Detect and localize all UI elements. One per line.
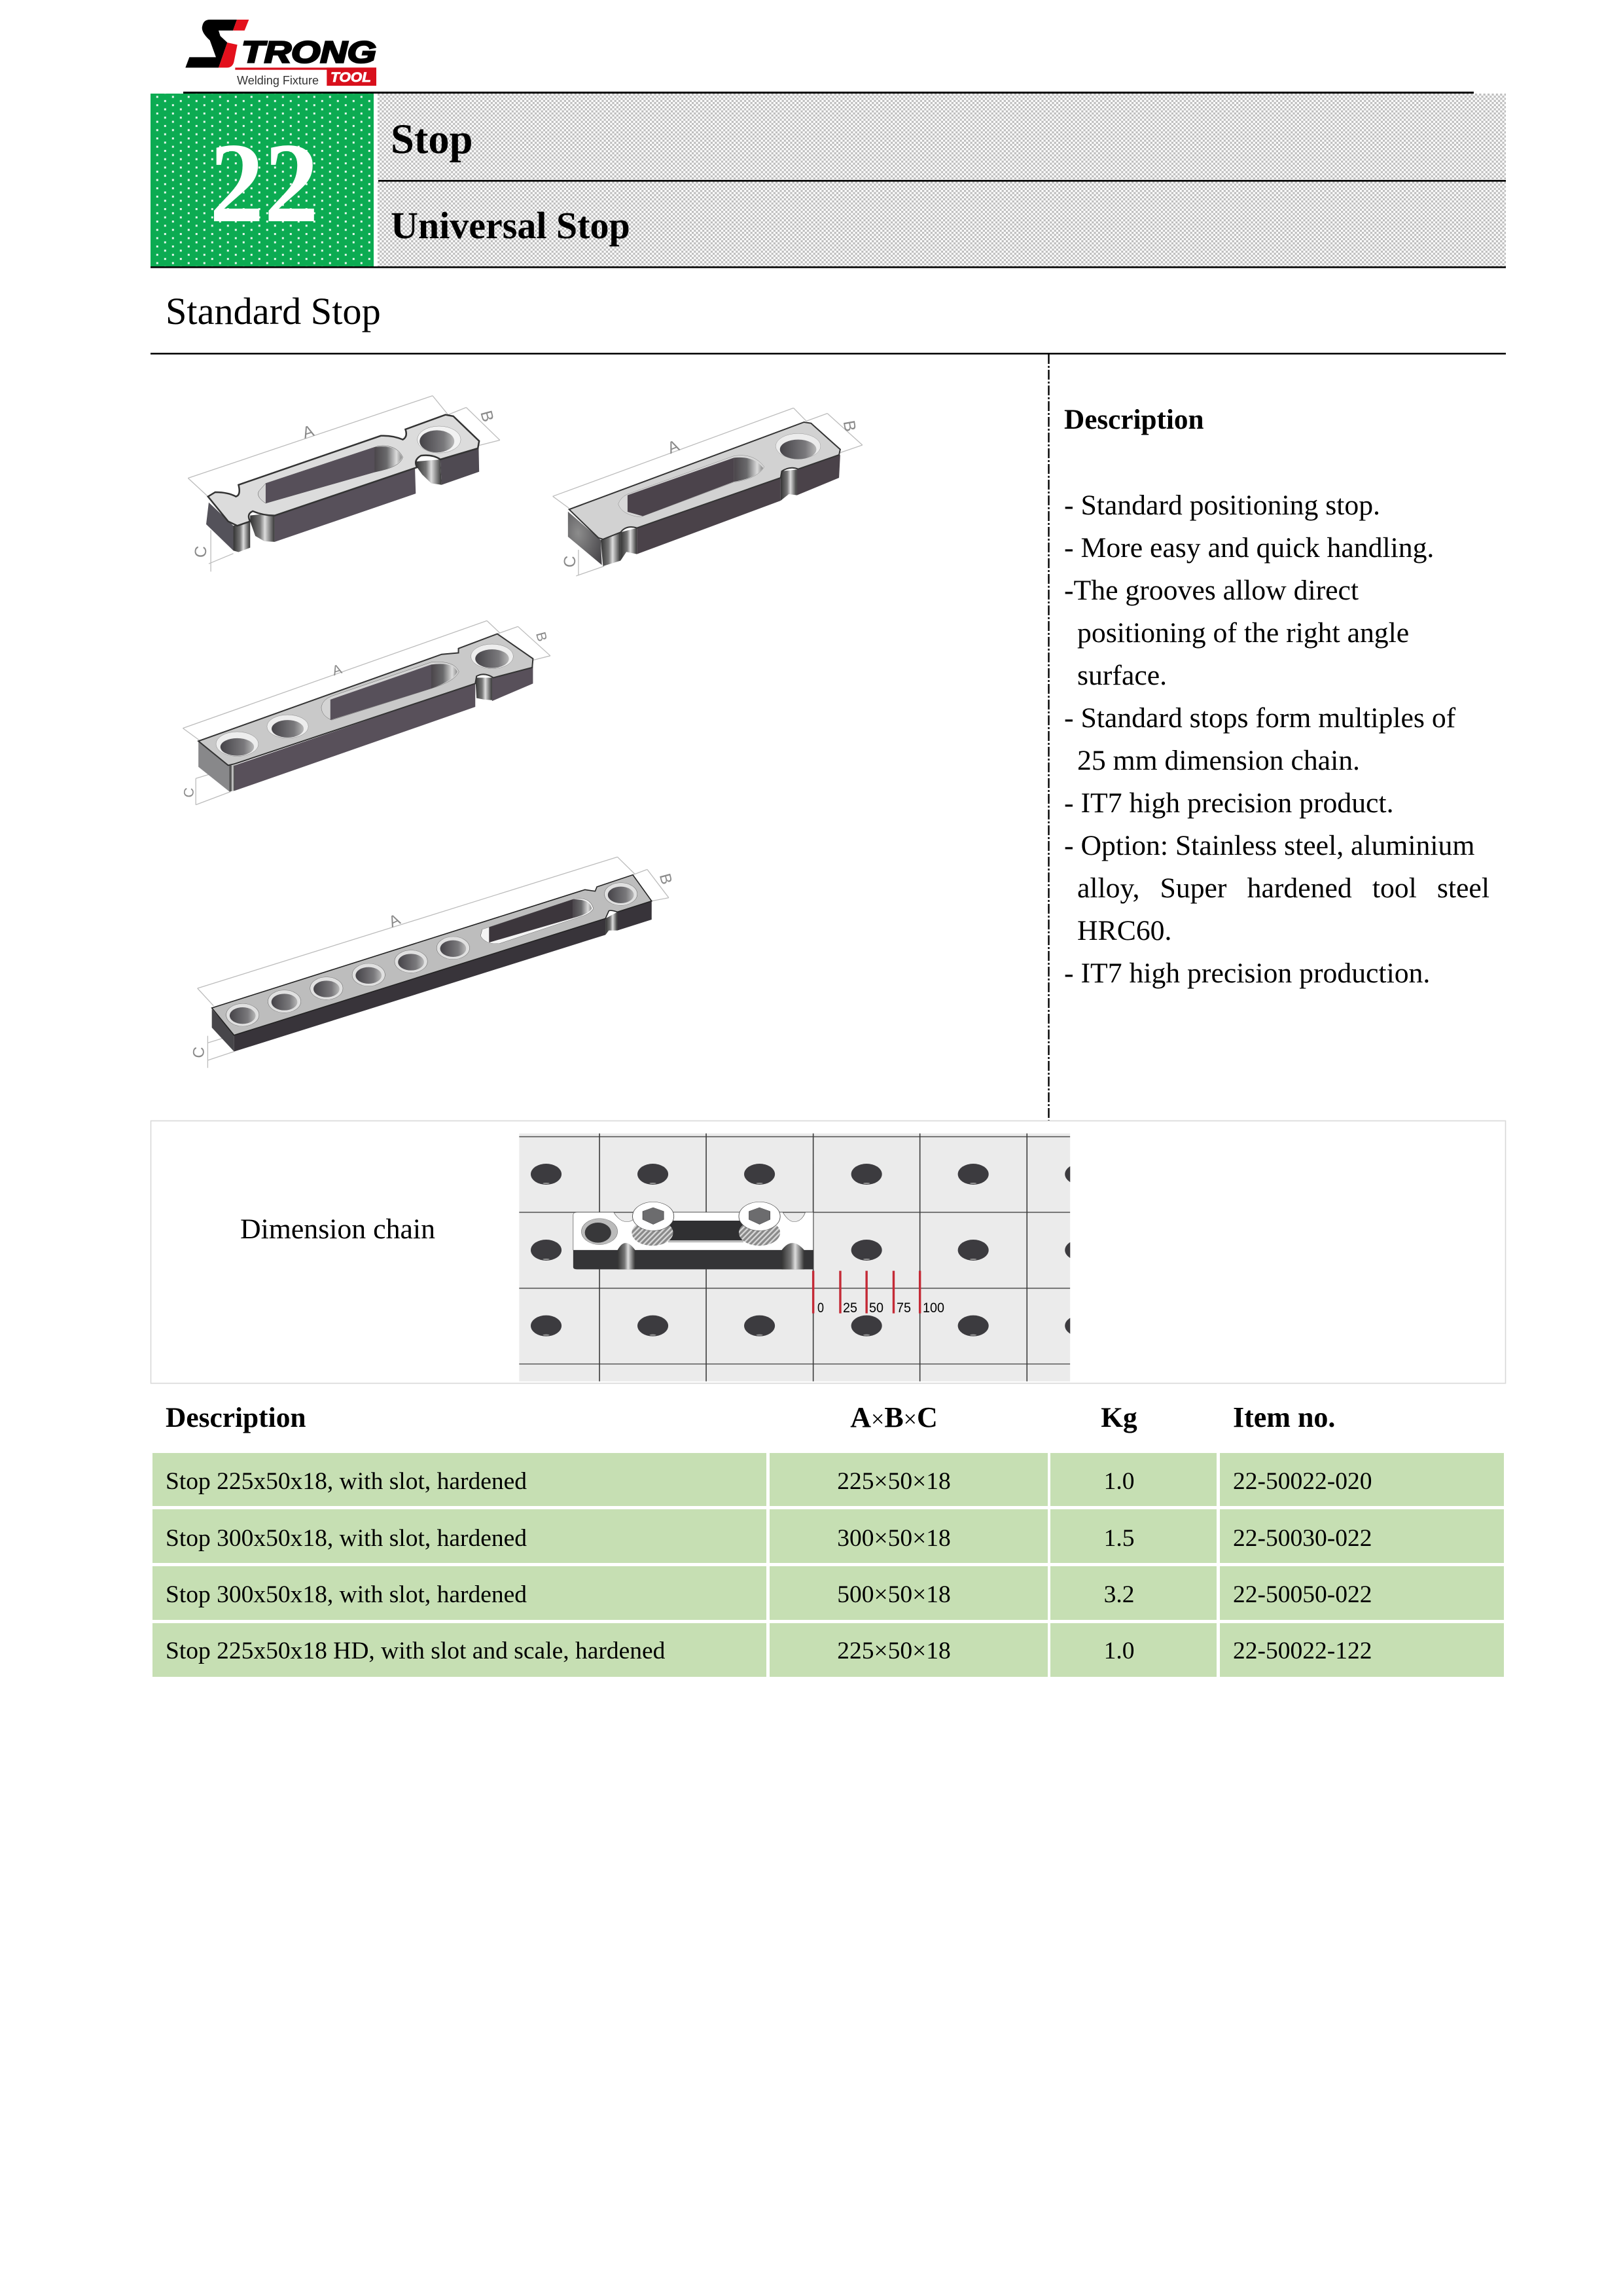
header band: hatched title panel: [151, 92, 1506, 268]
product drawing: long stop with slot and seven holes: B: [656, 872, 675, 886]
dimension chain label: Dimension chain: [240, 1213, 435, 1245]
logo: Strong Tool Welding Fixture: TRONG: [241, 35, 376, 69]
product drawing: stop with two notches at both ends: C: [191, 545, 211, 558]
product drawing: stop with slot and one countersunk hole: C: [560, 555, 580, 568]
header band: hatched title panel: Stop: [391, 116, 473, 162]
table header row: Item no.: [1233, 1401, 1335, 1433]
plate diagram with mounted stop and scale: 100: [923, 1300, 944, 1316]
product drawing: stop with slot and three holes: [181, 620, 550, 805]
plate diagram with mounted stop and scale: [519, 1134, 1096, 1382]
product drawing: stop with slot and three holes: C: [181, 787, 197, 798]
product drawing: stop with slot and one countersunk hole: [553, 408, 863, 576]
table row 1: 225×50×18: [837, 1468, 951, 1495]
table row 4: [152, 1623, 1504, 1677]
logo: Strong Tool Welding Fixture: Welding Fixture: [237, 73, 319, 87]
table row 1: 1.0: [1104, 1468, 1134, 1495]
table row 3: [152, 1566, 1504, 1620]
table row 2: 300×50×18: [837, 1525, 951, 1552]
product drawing: stop with slot and three holes: A: [330, 662, 344, 679]
logo: Strong Tool Welding Fixture: TOOL: [330, 70, 371, 85]
product drawing: long stop with slot and seven holes: [190, 857, 675, 1068]
description text block: - More easy and quick handling.: [1064, 532, 1434, 564]
vertical dashed divider: [1048, 354, 1050, 1121]
product drawing: stop with slot and three holes: B: [533, 630, 550, 643]
table row 3: 22-50050-022: [1233, 1581, 1372, 1608]
table row 1: Stop 225x50x18, with slot, hardened: [166, 1468, 527, 1495]
description text block: - Option: Stainless steel, aluminium: [1064, 830, 1474, 861]
table row 3: 500×50×18: [837, 1581, 951, 1608]
table row 2: Stop 300x50x18, with slot, hardened: [166, 1525, 527, 1552]
plate diagram with mounted stop and scale: 25: [843, 1300, 857, 1316]
description text block: - Standard positioning stop.: [1064, 490, 1380, 521]
table row 2: [152, 1509, 1504, 1563]
table row 1: [152, 1453, 1504, 1506]
description text block: alloy, Super hardened tool steel: [1077, 872, 1489, 904]
description text block: - Standard stops form multiples of: [1064, 702, 1456, 734]
description text block: -The grooves allow direct: [1064, 575, 1359, 606]
panel: dimension chain: [151, 1121, 1505, 1384]
table row 3: 3.2: [1104, 1581, 1134, 1608]
table header row: A×B×C: [850, 1401, 938, 1433]
header band: green number block: 22: [209, 119, 319, 246]
plate diagram with mounted stop and scale: 75: [897, 1300, 911, 1316]
table header row: [166, 1401, 1335, 1433]
description text block: 25 mm dimension chain.: [1077, 745, 1360, 776]
table row 4: 1.0: [1104, 1638, 1134, 1664]
plate diagram with mounted stop and scale: 50: [869, 1300, 883, 1316]
description text block: surface.: [1077, 660, 1167, 691]
table header row: Kg: [1101, 1402, 1137, 1433]
table row 4: Stop 225x50x18 HD, with slot and scale, hardened: [166, 1638, 666, 1664]
table row 2: 1.5: [1104, 1525, 1134, 1552]
plate diagram with mounted stop and scale: 0: [817, 1300, 824, 1316]
product drawing: stop with two notches at both ends: B: [476, 408, 497, 424]
table row 4: 22-50022-122: [1233, 1638, 1372, 1664]
description text block: [1064, 404, 1489, 989]
header band: green number block: [151, 94, 374, 266]
table header row: Description: [166, 1402, 306, 1433]
product drawing: long stop with slot and seven holes: C: [190, 1046, 208, 1059]
product drawing: long stop with slot and seven holes: A: [386, 910, 403, 931]
product drawing: stop with slot and one countersunk hole: B: [840, 419, 859, 433]
description text block: - IT7 high precision production.: [1064, 958, 1430, 989]
table row 4: 225×50×18: [837, 1638, 951, 1664]
product drawing: stop with two notches at both ends: A: [300, 422, 316, 442]
table row 1: 22-50022-020: [1233, 1468, 1372, 1495]
description text block: - IT7 high precision product.: [1064, 787, 1394, 819]
logo: Strong Tool Welding Fixture: [185, 20, 376, 87]
header band: hatched title panel: Universal Stop: [391, 204, 630, 247]
section heading: Standard Stop: Standard Stop: [166, 290, 381, 332]
table row 2: 22-50030-022: [1233, 1525, 1372, 1552]
product drawing: stop with slot and one countersunk hole: A: [665, 437, 682, 457]
description text block: HRC60.: [1077, 915, 1171, 946]
description text block: Description: [1064, 404, 1204, 435]
table row 3: Stop 300x50x18, with slot, hardened: [166, 1581, 527, 1608]
description text block: positioning of the right angle: [1077, 617, 1409, 649]
product drawing: stop with two notches at both ends: [188, 396, 500, 571]
